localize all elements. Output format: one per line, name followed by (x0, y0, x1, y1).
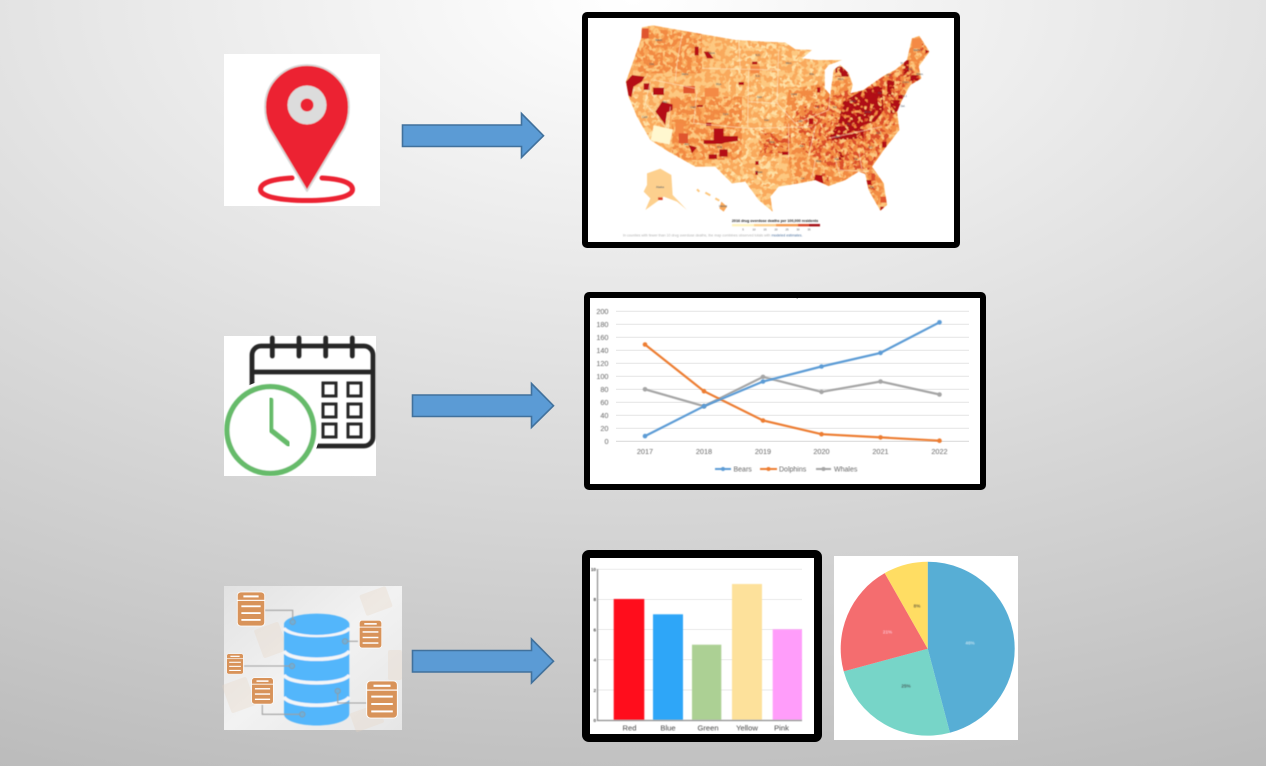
state labels: Mass. (916, 72, 924, 76)
state labels: S.D. (755, 74, 761, 78)
map legend: 30 (796, 228, 800, 232)
state labels: N.D. (755, 53, 761, 57)
faint background documents (222, 586, 402, 733)
state labels: Ky. (847, 122, 851, 126)
state labels: W.Va. (865, 110, 872, 114)
chart legend (715, 466, 858, 474)
bar x axis labels: Blue (660, 724, 676, 732)
state labels: Vt. (900, 61, 904, 65)
gridlines (616, 311, 969, 441)
icon: location pin (224, 54, 380, 206)
state labels: Alaska (656, 185, 665, 189)
state labels: Ill. (817, 105, 820, 109)
state labels: Iowa (791, 92, 797, 96)
pie labels: 8% (914, 604, 920, 608)
state labels: Wis. (809, 72, 815, 76)
state labels: Mich. (838, 77, 844, 81)
arrow: data to charts (412, 639, 554, 683)
map legend: 35 (807, 228, 811, 232)
bar y axis labels: 6 (593, 628, 596, 632)
bar x axis labels (623, 724, 789, 732)
state labels: Calif. (642, 115, 648, 119)
bar y axis labels: 4 (593, 658, 596, 662)
map legend: 20 (774, 228, 778, 232)
connector lines (244, 610, 367, 717)
database cylinder (284, 614, 349, 726)
pie labels: 25% (901, 684, 911, 688)
chart legend: Bears (734, 466, 752, 474)
chart legend: Whales (834, 466, 858, 474)
y axis labels: 180 (596, 320, 608, 329)
state labels: La. (801, 176, 805, 180)
y axis labels: 20 (600, 424, 608, 433)
state labels: Ore. (649, 62, 655, 66)
y axis labels: 80 (600, 385, 608, 394)
state labels: Neb. (757, 95, 763, 99)
map legend (732, 219, 820, 232)
pie slice: teal 25% (844, 649, 950, 736)
panel: county overdose map (585, 15, 957, 245)
state labels: Okla. (769, 140, 775, 144)
state labels: Minn. (786, 61, 793, 65)
pie slice: red 21% (841, 573, 928, 671)
series: bears (643, 320, 942, 438)
x axis labels: 2022 (931, 447, 948, 456)
panel: pie chart (834, 556, 1018, 740)
x axis labels: 2021 (872, 447, 889, 456)
state labels: Idaho (682, 72, 689, 76)
pie labels: 46% (965, 640, 975, 646)
pie slice: blue 46% (928, 562, 1015, 733)
bars (614, 584, 802, 720)
x axis labels: 2020 (813, 447, 830, 456)
y axis labels: 60 (600, 398, 608, 407)
state labels: Ind. (833, 105, 837, 109)
document card 3 (227, 654, 243, 674)
y axis labels (596, 307, 608, 446)
y axis labels: 140 (596, 346, 608, 355)
state labels: Maine (913, 48, 921, 52)
x axis labels (637, 447, 948, 456)
clock (224, 383, 318, 476)
map legend: 25 (785, 228, 789, 232)
state labels: Pa. (878, 91, 882, 95)
icon: database with documents (222, 586, 402, 733)
document card 5 (367, 681, 397, 718)
state labels: Ariz. (684, 142, 690, 146)
state labels: Utah (690, 105, 696, 109)
calendar (252, 338, 373, 446)
icon: calendar and clock (221, 336, 376, 480)
y axis labels: 120 (596, 359, 608, 368)
state labels: N.M. (717, 145, 723, 149)
x axis labels: 2019 (755, 447, 771, 456)
state labels: Texas (755, 170, 763, 174)
x axis labels: 2018 (696, 447, 712, 456)
state labels: S.C. (868, 145, 874, 149)
state labels: Ohio (850, 99, 856, 103)
bar x axis labels: Red (623, 724, 636, 732)
state labels: N.H. (907, 67, 913, 71)
state labels: Conn. (902, 80, 910, 84)
arrow: location to map (402, 114, 544, 158)
state labels: Mont. (709, 51, 716, 55)
arrow: time to line chart (412, 384, 554, 428)
series: whales (643, 375, 942, 409)
Alaska and Hawaii (644, 169, 727, 212)
state labels: Mo. (799, 119, 803, 123)
y axis labels: 100 (596, 372, 608, 381)
state labels: Wash. (655, 38, 663, 42)
clipped chart title: Animal Population (760, 290, 824, 299)
bar y axis labels (591, 567, 596, 723)
series: dolphins (643, 342, 942, 443)
bar y axis labels: 10 (591, 567, 596, 572)
chart frame (587, 295, 983, 487)
bar axes (598, 569, 802, 720)
bar y axis labels: 0 (593, 718, 596, 723)
state labels: Wyo. (716, 82, 722, 86)
y axis labels: 0 (604, 437, 608, 446)
chart legend: Dolphins (779, 466, 807, 474)
document card 4 (252, 678, 273, 704)
document card 1 (237, 592, 265, 626)
state labels: Miss. (816, 159, 822, 163)
map legend: 2016 drug overdose deaths per 100,000 residents (732, 219, 818, 223)
state labels: Colo. (723, 112, 729, 116)
state labels: Tenn. (835, 135, 842, 139)
map legend: 10 (752, 228, 756, 232)
state labels: Ga. (854, 157, 858, 161)
state labels: Del. (901, 104, 906, 108)
panel: line chart (587, 290, 983, 487)
state labels: Kan. (764, 118, 770, 122)
state labels: N.J. (903, 94, 908, 98)
state labels: Ala. (835, 157, 840, 161)
pie labels: 21% (883, 630, 892, 634)
state labels: Fla. (870, 185, 874, 189)
state labels: Ark. (800, 144, 805, 148)
pie slice: yellow 8% (885, 562, 928, 649)
map footnote: In counties with fewer than 10 drug overdose deaths, the map combines observed totals with modeled estimates. (623, 234, 803, 238)
pie labels (883, 604, 975, 688)
y axis labels: 200 (596, 307, 608, 316)
state labels: Nev. (662, 100, 668, 104)
bar y axis labels: 8 (593, 597, 596, 602)
document card 2 (359, 620, 382, 648)
state labels: N.C. (876, 131, 882, 135)
bar x axis labels: Pink (774, 724, 789, 732)
bar x axis labels: Yellow (736, 724, 758, 732)
choropleth map of the United States (622, 23, 932, 217)
state labels: Hawaii (719, 204, 727, 208)
panel: bar chart (586, 554, 818, 738)
y axis labels: 160 (596, 333, 608, 342)
map legend: 15 (763, 228, 767, 232)
bar y axis labels: 2 (593, 688, 596, 693)
state labels: N.Y. (887, 73, 892, 77)
map legend: 5 (742, 228, 744, 232)
x axis labels: 2017 (637, 447, 653, 456)
bar x axis labels: Green (697, 724, 719, 732)
state labels (642, 38, 924, 208)
y axis labels: 40 (600, 411, 608, 420)
bar gridlines (598, 569, 802, 690)
